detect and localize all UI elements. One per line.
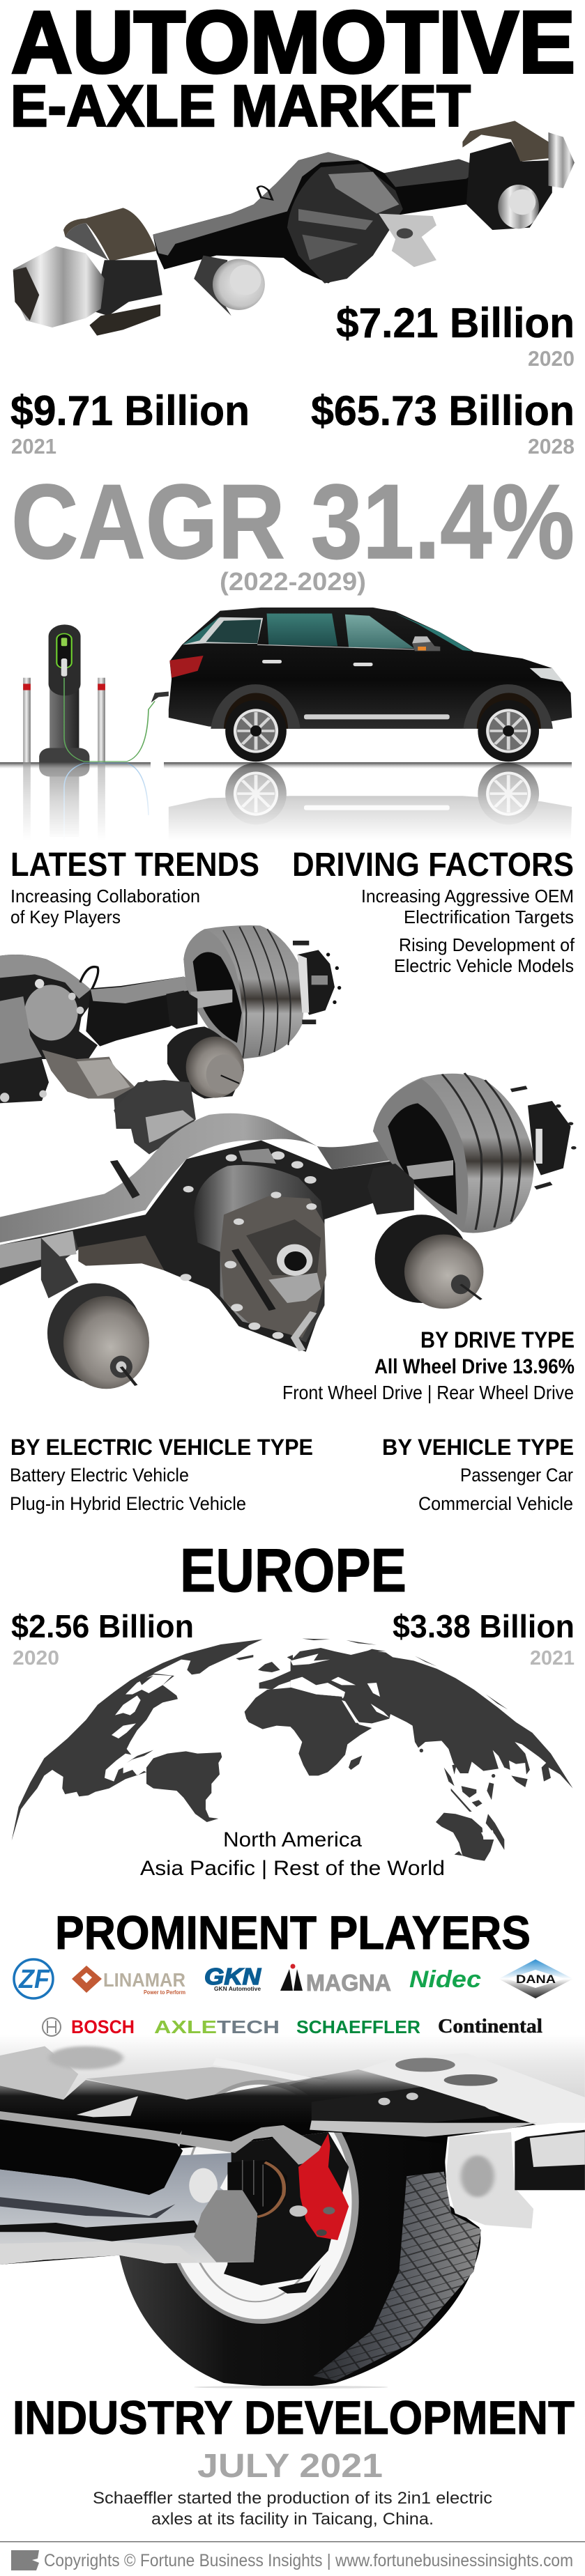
panel: driving factors: Rising Development of — [399, 934, 575, 955]
stat: Europe 2021: $3.38 Billion — [393, 1608, 575, 1644]
logo: Dana: DANA — [516, 1973, 556, 1986]
segment: by vehicle type: BY VEHICLE TYPE — [382, 1435, 574, 1460]
logo: Linamar: LINAMAR — [103, 1969, 185, 1991]
title — [10, 0, 575, 139]
map: world globe — [12, 1639, 573, 1861]
logo: Bosch — [43, 2016, 135, 2037]
logo: AxleTech: AXLE — [154, 2016, 217, 2037]
far shaft — [42, 1050, 197, 1129]
panel: driving factors: Increasing Aggressive OEM — [361, 886, 574, 907]
stat: Europe 2021 — [393, 1608, 575, 1669]
logo: Magna: MAGNA — [306, 1970, 391, 1996]
segment: by electric vehicle type — [10, 1435, 313, 1514]
segment: by vehicle type — [382, 1435, 574, 1514]
CAGR figure: (2022-2029) — [220, 567, 366, 596]
logos: prominent players row 1 — [14, 1959, 573, 1998]
stat: 2021 market size: $9.71 Billion — [10, 387, 250, 434]
panel: latest trends: of Key Players — [10, 907, 121, 927]
logo: Linamar: Power to Perform — [144, 1989, 185, 1996]
heading: prominent players: PROMINENT PLAYERS — [55, 1906, 531, 1959]
image: near axle — [0, 1073, 577, 1389]
title: E-AXLE MARKET — [10, 73, 471, 139]
image: far axle — [0, 925, 341, 1129]
segment: by vehicle type: Commercial Vehicle — [418, 1493, 573, 1514]
logo: Linamar — [72, 1966, 185, 1996]
panel: industry development — [13, 2391, 575, 2529]
segment: by drive type — [282, 1327, 575, 1403]
stat: 2020 market size: $7.21 Billion — [336, 300, 575, 346]
heading: Europe: EUROPE — [180, 1536, 407, 1605]
car — [169, 608, 572, 762]
panel: driving factors: Electric Vehicle Models — [394, 955, 574, 976]
logo: Nidec: Nidec — [409, 1966, 481, 1993]
stat: 2021 market size — [10, 387, 250, 458]
stat: Europe 2020: $2.56 Billion — [11, 1608, 194, 1644]
stat: 2028 market size: $65.73 Billion — [311, 387, 575, 434]
panel: industry development: JULY 2021 — [197, 2448, 383, 2485]
stat: 2020 market size — [336, 300, 575, 371]
logo: AxleTech — [154, 2016, 280, 2037]
text: other regions: Asia Pacific | Rest of the World — [140, 1857, 445, 1880]
icon: charging station — [23, 624, 169, 762]
logo: Dana — [499, 1959, 573, 1998]
segment: by electric vehicle type: Battery Electric Vehicle — [10, 1465, 189, 1486]
logo: AxleTech: TECH — [217, 2016, 280, 2037]
panel: driving factors: Electrification Targets — [404, 907, 574, 927]
reflection: car and charger on floor — [23, 762, 572, 833]
wheel — [478, 700, 539, 762]
logo: GKN: GKN Automotive — [214, 1986, 261, 1992]
panel: industry development: Schaeffler started the production of its 2in1 electric — [93, 2489, 492, 2508]
stat: Europe 2020 — [11, 1608, 194, 1669]
logo: Magna — [280, 1964, 391, 1996]
stat: Europe 2021: 2021 — [530, 1647, 575, 1669]
stat: 2021 market size: 2021 — [11, 434, 56, 458]
panel: industry development: axles at its facility in Taicang, China. — [151, 2510, 434, 2529]
image: e-axle assembly — [13, 121, 575, 336]
panel: latest trends: LATEST TRENDS — [10, 847, 259, 884]
logo: ZF: ZF — [18, 1965, 51, 1994]
stat: Europe 2020: 2020 — [13, 1647, 59, 1669]
logo: ZF — [14, 1959, 53, 1998]
stat: 2028 market size: 2028 — [528, 434, 575, 458]
illustration: electric car charging — [23, 608, 572, 762]
icon: Fortune Business Insights logo — [11, 2550, 39, 2570]
panel: latest trends: Increasing Collaboration — [10, 886, 200, 907]
logo: Schaeffler: SCHAEFFLER — [296, 2016, 420, 2037]
logo: Bosch: BOSCH — [71, 2016, 135, 2037]
segment: by electric vehicle type: Plug-in Hybrid Electric Vehicle — [10, 1493, 246, 1514]
panel: latest trends — [10, 847, 259, 927]
logos: prominent players row 2 — [43, 2015, 542, 2037]
text: other regions — [140, 1828, 445, 1880]
text: other regions: North America — [223, 1828, 362, 1851]
panel: driving factors — [292, 847, 575, 976]
segment: by drive type: BY DRIVE TYPE — [420, 1327, 575, 1352]
segment: by electric vehicle type: BY ELECTRIC VEHICLE TYPE — [10, 1435, 313, 1460]
stat: 2020 market size: 2020 — [528, 346, 575, 371]
image: wheel and undercarriage photo — [0, 2035, 585, 2389]
logo: Continental: Continental — [438, 2015, 542, 2037]
shadow line: ground — [0, 762, 572, 769]
logo: GKN: GKN — [204, 1964, 261, 1989]
stat: 2028 market size — [311, 387, 575, 458]
segment: by vehicle type: Passenger Car — [460, 1465, 573, 1486]
wheel — [225, 700, 287, 762]
